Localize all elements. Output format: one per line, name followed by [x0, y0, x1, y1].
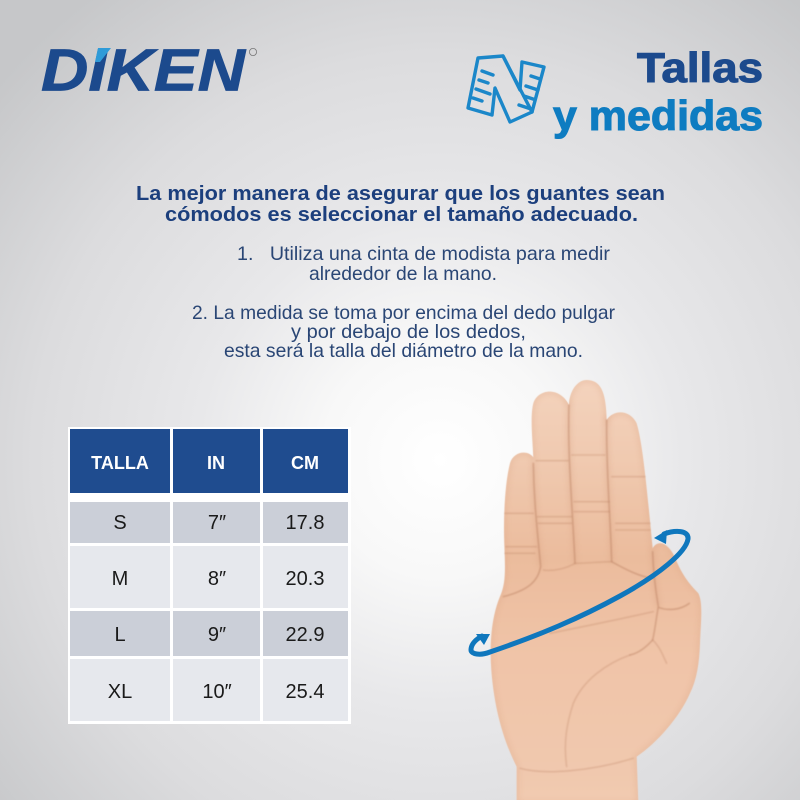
table header: TALLA	[91, 453, 149, 473]
row: XL	[70, 659, 348, 721]
arrow: measuring loop around the palm	[471, 530, 688, 654]
row: M: 8″	[208, 568, 226, 590]
text block: instructions	[192, 243, 615, 362]
heading: intro statement: La mejor manera de asegurar que los guantes sean	[136, 183, 665, 205]
row: S: 17.8	[286, 512, 324, 534]
title: Tallas y medidas: y medidas	[553, 92, 763, 139]
row: S: S	[113, 512, 127, 534]
table header: CM	[291, 453, 319, 473]
row: XL: XL	[108, 681, 132, 703]
arrowhead: bottom	[476, 634, 490, 645]
row: S	[70, 502, 348, 543]
heading: intro statement: cómodos es seleccionar el tamaño adecuado.	[165, 204, 638, 226]
row: L: L	[114, 624, 126, 646]
logo: DIKEN: DIKEN	[41, 38, 247, 104]
size table	[68, 427, 351, 724]
text block: instructions: 2. La medida se toma por encima del dedo pulgar	[192, 302, 615, 324]
row: L: 22.9	[286, 624, 324, 646]
row: S: 7″	[208, 512, 226, 534]
row: L	[70, 611, 348, 656]
title: Tallas y medidas	[553, 44, 763, 139]
title: Tallas y medidas: Tallas	[637, 44, 763, 91]
row: M	[70, 546, 348, 608]
palm and knuckle creases	[505, 455, 667, 772]
row: L: 9″	[208, 624, 226, 646]
arrowhead: top	[654, 530, 667, 544]
table header	[70, 429, 348, 493]
finger gaps and thumb lines	[503, 405, 689, 655]
text block: instructions: esta será la talla del diámetro de la mano.	[224, 340, 583, 362]
text block: instructions: 1. Utiliza una cinta de modista para medir	[237, 243, 610, 265]
row: XL: 25.4	[286, 681, 324, 703]
table header: IN	[207, 453, 225, 473]
hand illustration	[491, 380, 701, 800]
heading: intro statement	[136, 183, 665, 226]
row: M: M	[112, 568, 128, 590]
row: M: 20.3	[286, 568, 324, 590]
text block: instructions: y por debajo de los dedos,	[291, 321, 526, 343]
finger gap shading	[532, 407, 610, 490]
row: XL: 10″	[202, 681, 232, 703]
text block: instructions: alrededor de la mano.	[309, 263, 497, 285]
icon: folded measuring tape	[468, 56, 544, 122]
